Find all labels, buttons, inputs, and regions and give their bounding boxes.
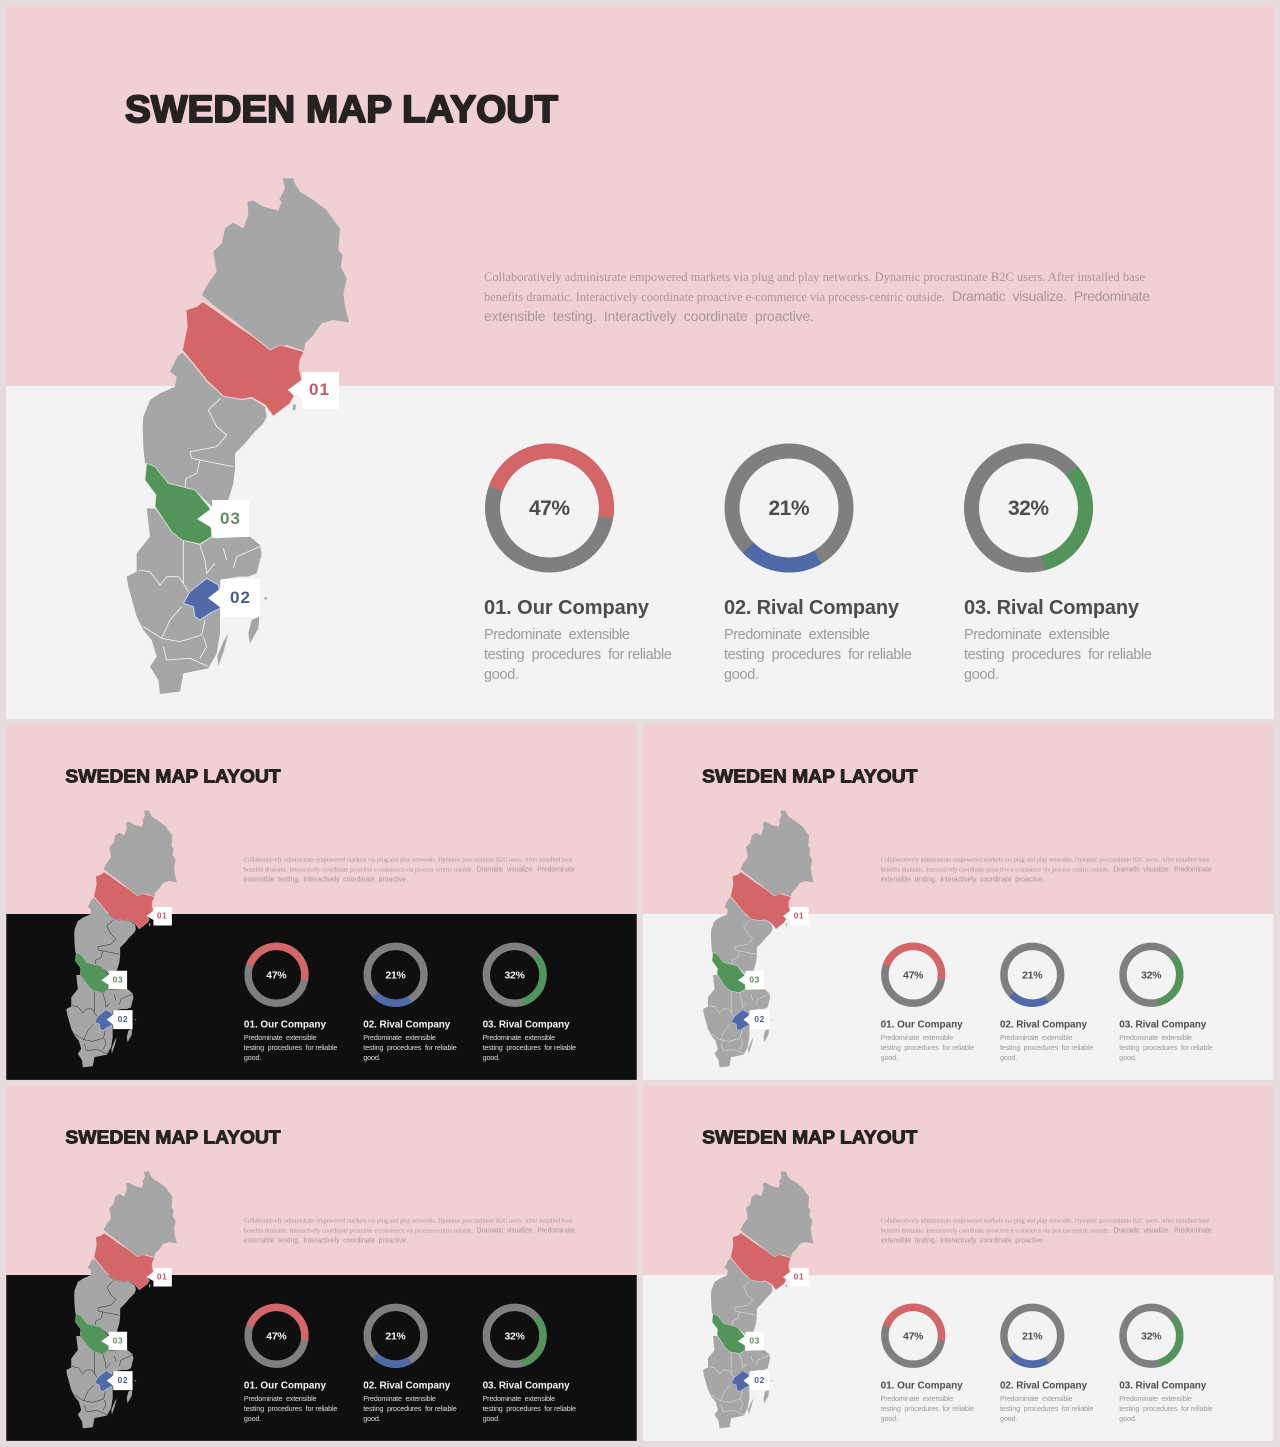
callout 01 [288, 372, 339, 409]
company 01 text: 01. Our Company [484, 597, 650, 619]
company 03 text: 03. Rival Company [483, 1381, 570, 1392]
map: Sweden regions [127, 178, 349, 694]
light content band [6, 386, 1274, 719]
company 02 text [363, 1020, 457, 1062]
donut chart 21%: 21% [1022, 1331, 1042, 1342]
company 02 text: 02. Rival Company [363, 1381, 451, 1392]
intro paragraph: extensible testing. Interactively coordinate proactive. [484, 308, 814, 324]
panel: small slide light bottom-right [643, 1085, 1273, 1441]
donut chart 32% [1111, 1296, 1191, 1376]
pink header band [6, 1085, 637, 1275]
company 03 text [1119, 1381, 1213, 1423]
callout 02 [107, 1371, 133, 1390]
company 01 text: good. [244, 1053, 261, 1062]
callout 02 [208, 579, 260, 617]
callout 01 [146, 907, 172, 925]
company 01 text: testing procedures for reliable [881, 1043, 974, 1052]
intro paragraph: Collaboratively administrate empowered markets via plug and play networks. Dynamic procrastinate B2C users. After installed base [881, 857, 1210, 864]
dark content band [6, 1275, 637, 1441]
company 02 text: testing procedures for reliable [363, 1043, 457, 1052]
company 03 text: Predominate extensible [1119, 1394, 1192, 1403]
company 02 text: Predominate extensible [363, 1394, 436, 1403]
company 02 text [363, 1381, 457, 1423]
company 01 text: Predominate extensible [484, 627, 630, 643]
title: SWEDEN MAP LAYOUT [125, 89, 558, 131]
intro paragraph: Collaboratively administrate empowered markets via plug and play networks. Dynamic procrastinate B2C users. After installed base [244, 1218, 573, 1225]
intro paragraph: benefits dramatic. Interactively coordinate proactive e-commerce via process-centric outside. [484, 290, 945, 304]
company 01 text: testing procedures for reliable [244, 1043, 337, 1052]
company 03 text: good. [964, 667, 999, 683]
company 03 text: good. [1119, 1414, 1137, 1423]
donut chart 32%: 32% [504, 970, 525, 981]
company 03 text: 03. Rival Company [964, 597, 1140, 619]
company 03 text: Predominate extensible [1119, 1033, 1192, 1042]
donut chart 32%: 32% [504, 1331, 525, 1342]
callout 02: 02 [230, 588, 250, 607]
intro paragraph: Collaboratively administrate empowered markets via plug and play networks. Dynamic procrastinate B2C users. After installed base [244, 857, 573, 864]
title: SWEDEN MAP LAYOUT [702, 767, 918, 788]
light content band [643, 914, 1273, 1080]
panel: small slide dark bottom-left [6, 1085, 637, 1441]
callout 03 [738, 1332, 764, 1350]
donut chart 21%: 21% [768, 497, 810, 520]
company 02 text [1000, 1381, 1093, 1423]
company 02 text: Predominate extensible [1000, 1394, 1073, 1403]
intro paragraph: benefits dramatic. Interactively coordinate proactive e-commerce via process-centric outside. [881, 867, 1110, 874]
callout 02: 02 [754, 1014, 765, 1024]
company 02 text: 02. Rival Company [1000, 1381, 1087, 1392]
donut chart 21% [994, 936, 1071, 1014]
callout 03: 03 [220, 509, 240, 528]
intro paragraph [244, 1218, 575, 1245]
company 03 text: 03. Rival Company [1119, 1381, 1207, 1392]
map: Sweden regions [703, 811, 814, 1067]
donut chart 21% [357, 936, 434, 1014]
callout 01: 01 [794, 1272, 804, 1282]
callout 02 [743, 1371, 769, 1390]
donut chart 32% [948, 428, 1109, 588]
company 02 text: 02. Rival Company [363, 1020, 451, 1031]
company 01 text: Predominate extensible [881, 1394, 953, 1403]
intro paragraph: extensible testing. Interactively coordinate proactive. [244, 877, 408, 884]
intro paragraph: benefits dramatic. Interactively coordinate proactive e-commerce via process-centric outside. [244, 867, 474, 874]
dark content band [6, 914, 637, 1080]
company 03 text: Predominate extensible [964, 627, 1110, 643]
intro paragraph: Dramatic visualize. Predominate [1113, 867, 1212, 874]
donut chart 32% [475, 1296, 555, 1376]
company 01 text: testing procedures for reliable [244, 1404, 337, 1413]
intro paragraph: Collaboratively administrate empowered markets via plug and play networks. Dynamic procrastinate B2C users. After installed base [881, 1218, 1210, 1225]
company 03 text: testing procedures for reliable [964, 647, 1152, 663]
donut chart 47%: 47% [266, 970, 287, 981]
donut chart 32% [1111, 935, 1191, 1015]
company 03 text: testing procedures for reliable [1119, 1043, 1213, 1052]
pink header band [6, 724, 637, 914]
intro paragraph [244, 857, 575, 884]
intro paragraph: Collaboratively administrate empowered markets via plug and play networks. Dynamic procrastinate B2C users. After installed base [484, 270, 1145, 284]
company 01 text: Predominate extensible [244, 1394, 317, 1403]
donut chart 47%: 47% [903, 1331, 923, 1342]
callout 03: 03 [113, 975, 123, 985]
company 01 text: 01. Our Company [244, 1020, 326, 1031]
donut chart 21%: 21% [1022, 970, 1042, 981]
callout 01 [146, 1268, 172, 1286]
donut chart 47% [240, 938, 313, 1011]
donut chart 21% [711, 430, 867, 586]
callout 03 [101, 971, 127, 989]
donut chart 47% [877, 1299, 950, 1372]
company 01 text: Predominate extensible [244, 1033, 317, 1042]
company 03 text [483, 1381, 576, 1423]
company 03 text: testing procedures for reliable [483, 1404, 576, 1413]
callout 02: 02 [754, 1375, 765, 1385]
company 03 text [964, 597, 1152, 683]
company 01 text: 01. Our Company [881, 1020, 963, 1031]
company 02 text: Predominate extensible [724, 627, 870, 643]
company 03 text: good. [1119, 1053, 1137, 1062]
company 01 text: 01. Our Company [881, 1381, 963, 1392]
company 02 text: 02. Rival Company [1000, 1020, 1087, 1031]
panel: main slide [6, 5, 1274, 719]
company 01 text: testing procedures for reliable [484, 647, 672, 663]
callout 01: 01 [794, 911, 804, 921]
intro paragraph: Dramatic visualize. Predominate [1113, 1228, 1212, 1235]
donut chart 32%: 32% [1008, 497, 1049, 520]
company 01 text [484, 597, 672, 683]
intro paragraph: benefits dramatic. Interactively coordinate proactive e-commerce via process-centric outside. [881, 1228, 1110, 1235]
company 02 text: testing procedures for reliable [724, 647, 912, 663]
company 01 text [244, 1381, 337, 1423]
title: SWEDEN MAP LAYOUT [702, 1128, 918, 1149]
donut chart 47% [877, 938, 950, 1011]
callout 03: 03 [113, 1336, 123, 1346]
donut chart 32%: 32% [1141, 970, 1162, 981]
intro paragraph: Dramatic visualize. Predominate [952, 288, 1150, 304]
company 02 text: Predominate extensible [1000, 1033, 1073, 1042]
company 01 text: good. [244, 1414, 261, 1423]
company 01 text [881, 1020, 974, 1062]
company 01 text: Predominate extensible [881, 1033, 953, 1042]
map: Sweden regions [703, 1172, 814, 1428]
company 01 text: good. [881, 1053, 898, 1062]
company 03 text: 03. Rival Company [1119, 1020, 1207, 1031]
intro paragraph: extensible testing. Interactively coordinate proactive. [244, 1238, 408, 1245]
callout 03 [197, 500, 249, 537]
company 02 text: 02. Rival Company [724, 597, 900, 619]
company 01 text [244, 1020, 337, 1062]
panel: small slide light top-right [643, 724, 1273, 1080]
company 01 text: 01. Our Company [244, 1381, 326, 1392]
callout 03: 03 [749, 1336, 760, 1346]
company 02 text: Predominate extensible [363, 1033, 436, 1042]
company 02 text: testing procedures for reliable [1000, 1404, 1093, 1413]
donut chart 47%: 47% [529, 497, 570, 520]
donut chart 21%: 21% [385, 1331, 406, 1342]
callout 01: 01 [309, 380, 329, 399]
company 02 text: testing procedures for reliable [1000, 1043, 1093, 1052]
map: Sweden regions [66, 1172, 177, 1428]
company 03 text: 03. Rival Company [483, 1020, 570, 1031]
company 03 text: good. [483, 1414, 500, 1423]
company 01 text: good. [881, 1414, 898, 1423]
callout 02: 02 [118, 1014, 128, 1024]
donut chart 47% [240, 1299, 313, 1372]
company 01 text: testing procedures for reliable [881, 1404, 974, 1413]
company 03 text: Predominate extensible [483, 1033, 555, 1042]
title: SWEDEN MAP LAYOUT [65, 767, 281, 788]
callout 01 [783, 1268, 809, 1286]
callout 02 [107, 1010, 133, 1029]
pink header band [643, 724, 1273, 914]
company 02 text: good. [363, 1053, 381, 1062]
map: Sweden regions [66, 811, 177, 1067]
pink header band [6, 5, 1274, 386]
donut chart 32%: 32% [1141, 1331, 1162, 1342]
company 02 text [724, 597, 912, 683]
donut chart 47%: 47% [903, 970, 923, 981]
callout 02: 02 [118, 1375, 128, 1385]
company 02 text: testing procedures for reliable [363, 1404, 457, 1413]
intro paragraph: extensible testing. Interactively coordinate proactive. [881, 1238, 1045, 1245]
title: SWEDEN MAP LAYOUT [65, 1128, 281, 1149]
pink header band [643, 1085, 1273, 1275]
callout 01 [783, 907, 809, 925]
company 03 text: Predominate extensible [483, 1394, 555, 1403]
callout 03 [738, 971, 764, 989]
donut chart 47% [476, 435, 623, 581]
company 03 text: testing procedures for reliable [1119, 1404, 1213, 1413]
intro paragraph: benefits dramatic. Interactively coordinate proactive e-commerce via process-centric outside. [244, 1228, 474, 1235]
donut chart 21%: 21% [385, 970, 406, 981]
donut chart 32% [475, 935, 555, 1015]
company 02 text: good. [363, 1414, 381, 1423]
callout 02 [743, 1010, 769, 1029]
callout 01: 01 [157, 911, 167, 921]
company 03 text [1119, 1020, 1213, 1062]
company 02 text [1000, 1020, 1093, 1062]
intro paragraph [484, 270, 1150, 324]
light content band [643, 1275, 1273, 1441]
company 01 text [881, 1381, 974, 1423]
donut chart 21% [994, 1297, 1071, 1375]
intro paragraph: Dramatic visualize. Predominate [477, 867, 575, 874]
intro paragraph [881, 1218, 1212, 1245]
company 02 text: good. [1000, 1414, 1017, 1423]
company 02 text: good. [724, 667, 759, 683]
donut chart 21% [357, 1297, 434, 1375]
callout 03 [101, 1332, 127, 1350]
company 01 text: good. [484, 667, 519, 683]
intro paragraph: extensible testing. Interactively coordinate proactive. [881, 877, 1045, 884]
company 03 text [483, 1020, 576, 1062]
intro paragraph: Dramatic visualize. Predominate [477, 1228, 575, 1235]
company 03 text: good. [483, 1053, 500, 1062]
donut chart 47%: 47% [266, 1331, 287, 1342]
callout 03: 03 [749, 975, 760, 985]
panel: small slide dark top-left [6, 724, 637, 1080]
callout 01: 01 [157, 1272, 167, 1282]
intro paragraph [881, 857, 1212, 884]
company 03 text: testing procedures for reliable [483, 1043, 576, 1052]
company 02 text: good. [1000, 1053, 1017, 1062]
